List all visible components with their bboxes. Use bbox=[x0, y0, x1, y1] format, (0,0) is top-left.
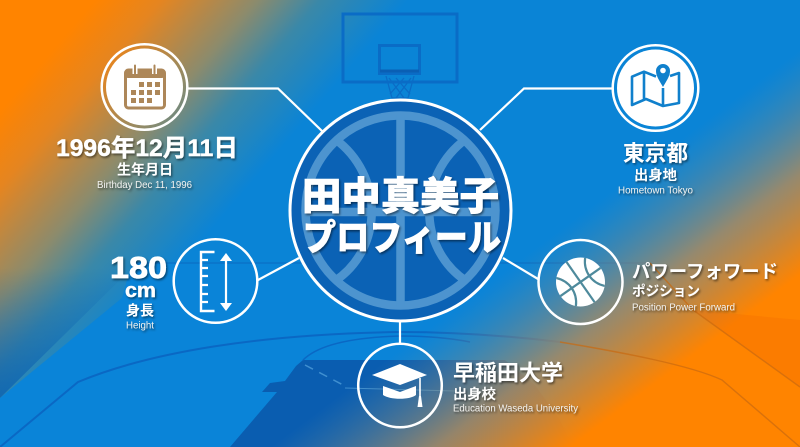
panel: position bbox=[538, 240, 778, 324]
education text bbox=[453, 360, 578, 414]
education text: Education Waseda University bbox=[453, 404, 578, 414]
court floor bbox=[0, 262, 800, 447]
height text bbox=[110, 250, 167, 332]
icon: ruler and arrow bbox=[174, 239, 257, 323]
panel: height bbox=[110, 239, 257, 332]
birthday text: Birthday Dec 11, 1996 bbox=[97, 180, 192, 191]
birthday text: 生年月日 bbox=[117, 162, 173, 178]
central basketball bbox=[290, 100, 511, 321]
education text: 出身校 bbox=[453, 386, 496, 402]
height text: cm bbox=[125, 280, 156, 302]
title: プロフィール bbox=[303, 217, 501, 258]
panel: hometown bbox=[613, 45, 698, 197]
position text: Position Power Forward bbox=[632, 302, 735, 314]
hometown text: 出身地 bbox=[634, 167, 677, 183]
panel: education bbox=[358, 344, 578, 427]
icon: calendar bbox=[102, 44, 187, 130]
height text: 身長 bbox=[126, 302, 154, 318]
position text: パワーフォワード bbox=[632, 261, 778, 282]
birthday text: 1996年12月11日 bbox=[56, 135, 238, 162]
hometown text bbox=[618, 141, 693, 196]
connector lines bbox=[188, 88, 612, 344]
position text bbox=[632, 261, 778, 314]
birthday text bbox=[56, 135, 238, 191]
icon: graduation cap bbox=[358, 344, 442, 427]
height text: 180 bbox=[110, 250, 167, 285]
basketball backboard and net bbox=[343, 14, 457, 98]
icon: basketball bbox=[538, 240, 622, 324]
height text: Height bbox=[126, 320, 154, 332]
hometown text: Hometown Tokyo bbox=[618, 186, 693, 196]
position text: ポジション bbox=[632, 283, 700, 299]
education text: 早稲田大学 bbox=[453, 360, 563, 386]
icon: map bbox=[613, 45, 698, 131]
panel: birthday bbox=[56, 44, 238, 191]
hometown text: 東京都 bbox=[623, 141, 688, 166]
title: 田中真美子 bbox=[302, 176, 499, 219]
court lines over glow bbox=[560, 263, 800, 447]
title bbox=[302, 176, 501, 258]
